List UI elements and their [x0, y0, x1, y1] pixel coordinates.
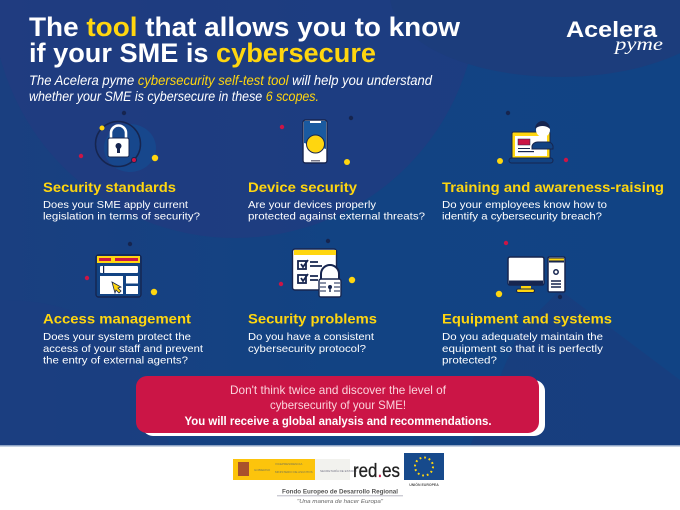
- block: security problems: Security problems: [248, 310, 377, 326]
- icon: checklist and lock: [279, 239, 355, 297]
- subtitle: The Acelera pyme cybersecurity self-test tool will help you understand: [29, 72, 433, 88]
- logo: Spanish government: VICEPRESIDENCIA: [275, 462, 302, 466]
- title: The tool that allows you to know: [29, 12, 460, 42]
- fund caption: Fondo Europeo de Desarrollo Regional: [282, 488, 398, 496]
- icon: browser window with cursor: [85, 242, 157, 297]
- logo: Spanish government: MINISTERIO DE ASUNTOS: [275, 470, 313, 474]
- callout banner: [136, 376, 545, 436]
- block: equipment and systems: [442, 310, 612, 366]
- logo: Spanish government: GOBIERNO: [254, 468, 271, 472]
- logo: Spanish government: [233, 459, 357, 480]
- block: access management: Access management: [43, 310, 191, 326]
- title: [29, 12, 460, 68]
- logo: Acelera pyme: [566, 17, 663, 54]
- icon: laptop with person: [497, 111, 568, 164]
- block: security standards: Does your SME apply current: [43, 200, 188, 211]
- callout banner: cybersecurity of your SME!: [270, 398, 406, 412]
- block: security standards: Security standards: [43, 179, 176, 195]
- subtitle: [29, 72, 433, 104]
- logo: red.es: red.es: [353, 461, 400, 482]
- block: security problems: cybersecurity protocol?: [248, 344, 366, 355]
- block: equipment and systems: protected?: [442, 356, 497, 366]
- footer: [0, 446, 680, 510]
- block: training: identify a cybersecurity breach?: [442, 212, 602, 222]
- icon: desktop computer: [496, 241, 565, 299]
- block: device security: Are your devices properly: [248, 200, 377, 211]
- logo: Spanish government: SECRETARÍA DE ESTADO: [320, 469, 357, 473]
- block: security problems: Do you have a consistent: [248, 332, 374, 343]
- block: device security: [248, 179, 425, 222]
- logo: Acelera pyme: pyme: [612, 34, 663, 54]
- callout banner: Don't think twice and discover the level of: [230, 383, 447, 397]
- block: security problems: [248, 310, 377, 355]
- title: if your SME is cybersecure: [29, 38, 376, 68]
- block: training: Training and awareness-raising: [442, 179, 664, 195]
- block: security standards: legislation in terms of security?: [43, 212, 200, 222]
- block: device security: Device security: [248, 179, 357, 195]
- fund caption: [277, 488, 403, 505]
- logo: EU flag: [404, 453, 444, 487]
- subtitle: whether your SME is cybersecure in these 6 scopes.: [29, 88, 319, 104]
- block: equipment and systems: Do you adequately maintain the: [442, 332, 603, 343]
- block: training: [442, 179, 664, 222]
- block: access management: access of your staff and prevent: [43, 344, 203, 355]
- block: security standards: [43, 179, 200, 222]
- block: equipment and systems: equipment so that it is perfectly: [442, 344, 604, 355]
- icon: phone: [280, 116, 353, 165]
- block: device security: protected against external threats?: [248, 212, 425, 222]
- block: access management: Does your system protect the: [43, 332, 191, 343]
- block: training: Do your employees know how to: [442, 200, 607, 211]
- block: equipment and systems: Equipment and systems: [442, 310, 612, 326]
- icon: padlock: [79, 111, 158, 172]
- logo: Acelera pyme: Acelera: [566, 17, 658, 42]
- fund caption: "Una manera de hacer Europa": [297, 499, 384, 505]
- block: access management: the entry of external agents?: [43, 356, 188, 366]
- logo: EU flag: UNIÓN EUROPEA: [409, 482, 439, 487]
- callout banner: You will receive a global analysis and recommendations.: [184, 416, 492, 428]
- block: access management: [43, 310, 203, 366]
